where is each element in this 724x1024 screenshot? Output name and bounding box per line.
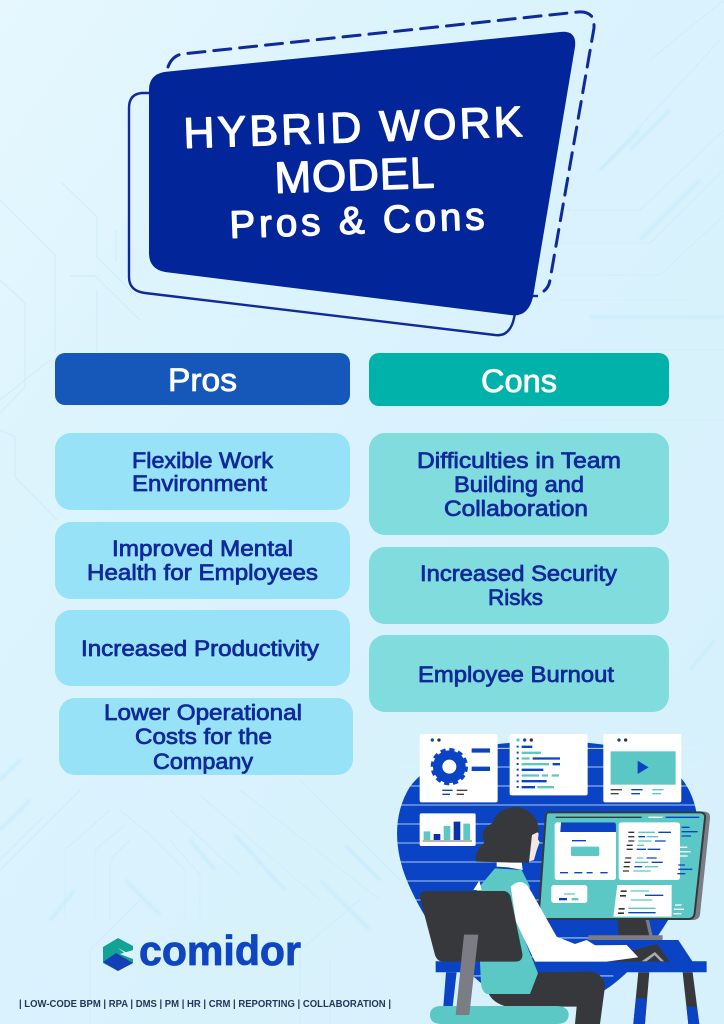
item: Flexible Work Environment: Environment: [132, 471, 267, 496]
neck: [497, 862, 523, 870]
outline: solid frame: [129, 93, 515, 335]
hair: [476, 807, 539, 863]
Cons header: Cons: [481, 363, 557, 399]
title: MODEL: [274, 148, 435, 203]
title: [183, 98, 523, 247]
chair: [420, 891, 569, 1024]
woman: [473, 807, 638, 1024]
header: title badge: [129, 12, 594, 335]
item: Team Building: Collaboration: [444, 496, 588, 521]
item: Lower Operational Costs: Lower Operational: [104, 700, 302, 725]
item: Improved Mental Health: Improved Mental: [112, 536, 293, 561]
card: code list: [510, 734, 588, 795]
outline: dashed frame: [168, 12, 594, 291]
column: Cons: [369, 353, 669, 712]
card: video player: [603, 734, 681, 802]
card: settings gear: [420, 734, 498, 802]
tick: dashed frame end: [533, 295, 538, 297]
blue blob with stripes: [397, 741, 700, 1009]
item: Security Risks: Increased Security: [420, 561, 617, 586]
column: Pros: [55, 353, 353, 775]
item: Flexible Work Environment: Flexible Work: [132, 448, 274, 473]
item: Lower Operational Costs: Costs for the: [135, 724, 272, 749]
legs: [488, 972, 605, 1024]
item: Improved Mental Health: Health for Employees: [87, 560, 318, 585]
monitor: [539, 812, 710, 940]
dark blue panel: [149, 32, 575, 315]
wordmark: comidor: [139, 927, 301, 974]
item: Employee Burnout: [369, 635, 669, 712]
keyboard: [613, 944, 670, 962]
item: Lower Operational Costs: [59, 698, 353, 775]
tagline: | LOW-CODE BPM | RPA | DMS | PM | HR | CRM | REPORTING | COLLABORATION |: [19, 998, 391, 1010]
shoulder: [473, 881, 482, 890]
item: Employee Burnout: Employee Burnout: [418, 662, 614, 687]
item: Improved Mental Health: [55, 522, 350, 599]
Pros header: [55, 353, 350, 405]
logo: comidor: [103, 927, 301, 974]
item: Increased Productivity: Increased Productivity: [81, 636, 319, 661]
item: Security Risks: Risks: [488, 585, 543, 610]
item: Team Building: [369, 433, 669, 535]
desk: [436, 940, 707, 1024]
icon: hexagon: [103, 938, 133, 971]
item: Flexible Work Environment: [55, 433, 350, 510]
card: bar chart: [420, 813, 476, 846]
arm and torso: [511, 882, 638, 962]
item: Security Risks: [369, 547, 669, 624]
face: [527, 827, 540, 862]
sleeveless top: [477, 868, 538, 994]
item: Increased Productivity: [55, 610, 350, 686]
item: Lower Operational Costs: Company: [153, 749, 253, 774]
item: Team Building: Difficulties in Team: [417, 448, 621, 473]
Pros header: Pros: [168, 362, 237, 398]
illustration: woman at desk: [397, 734, 710, 1024]
item: Team Building: Building and: [454, 472, 584, 497]
title: Pros & Cons: [229, 195, 485, 247]
title: HYBRID WORK: [183, 98, 523, 158]
Cons header: [369, 353, 669, 406]
